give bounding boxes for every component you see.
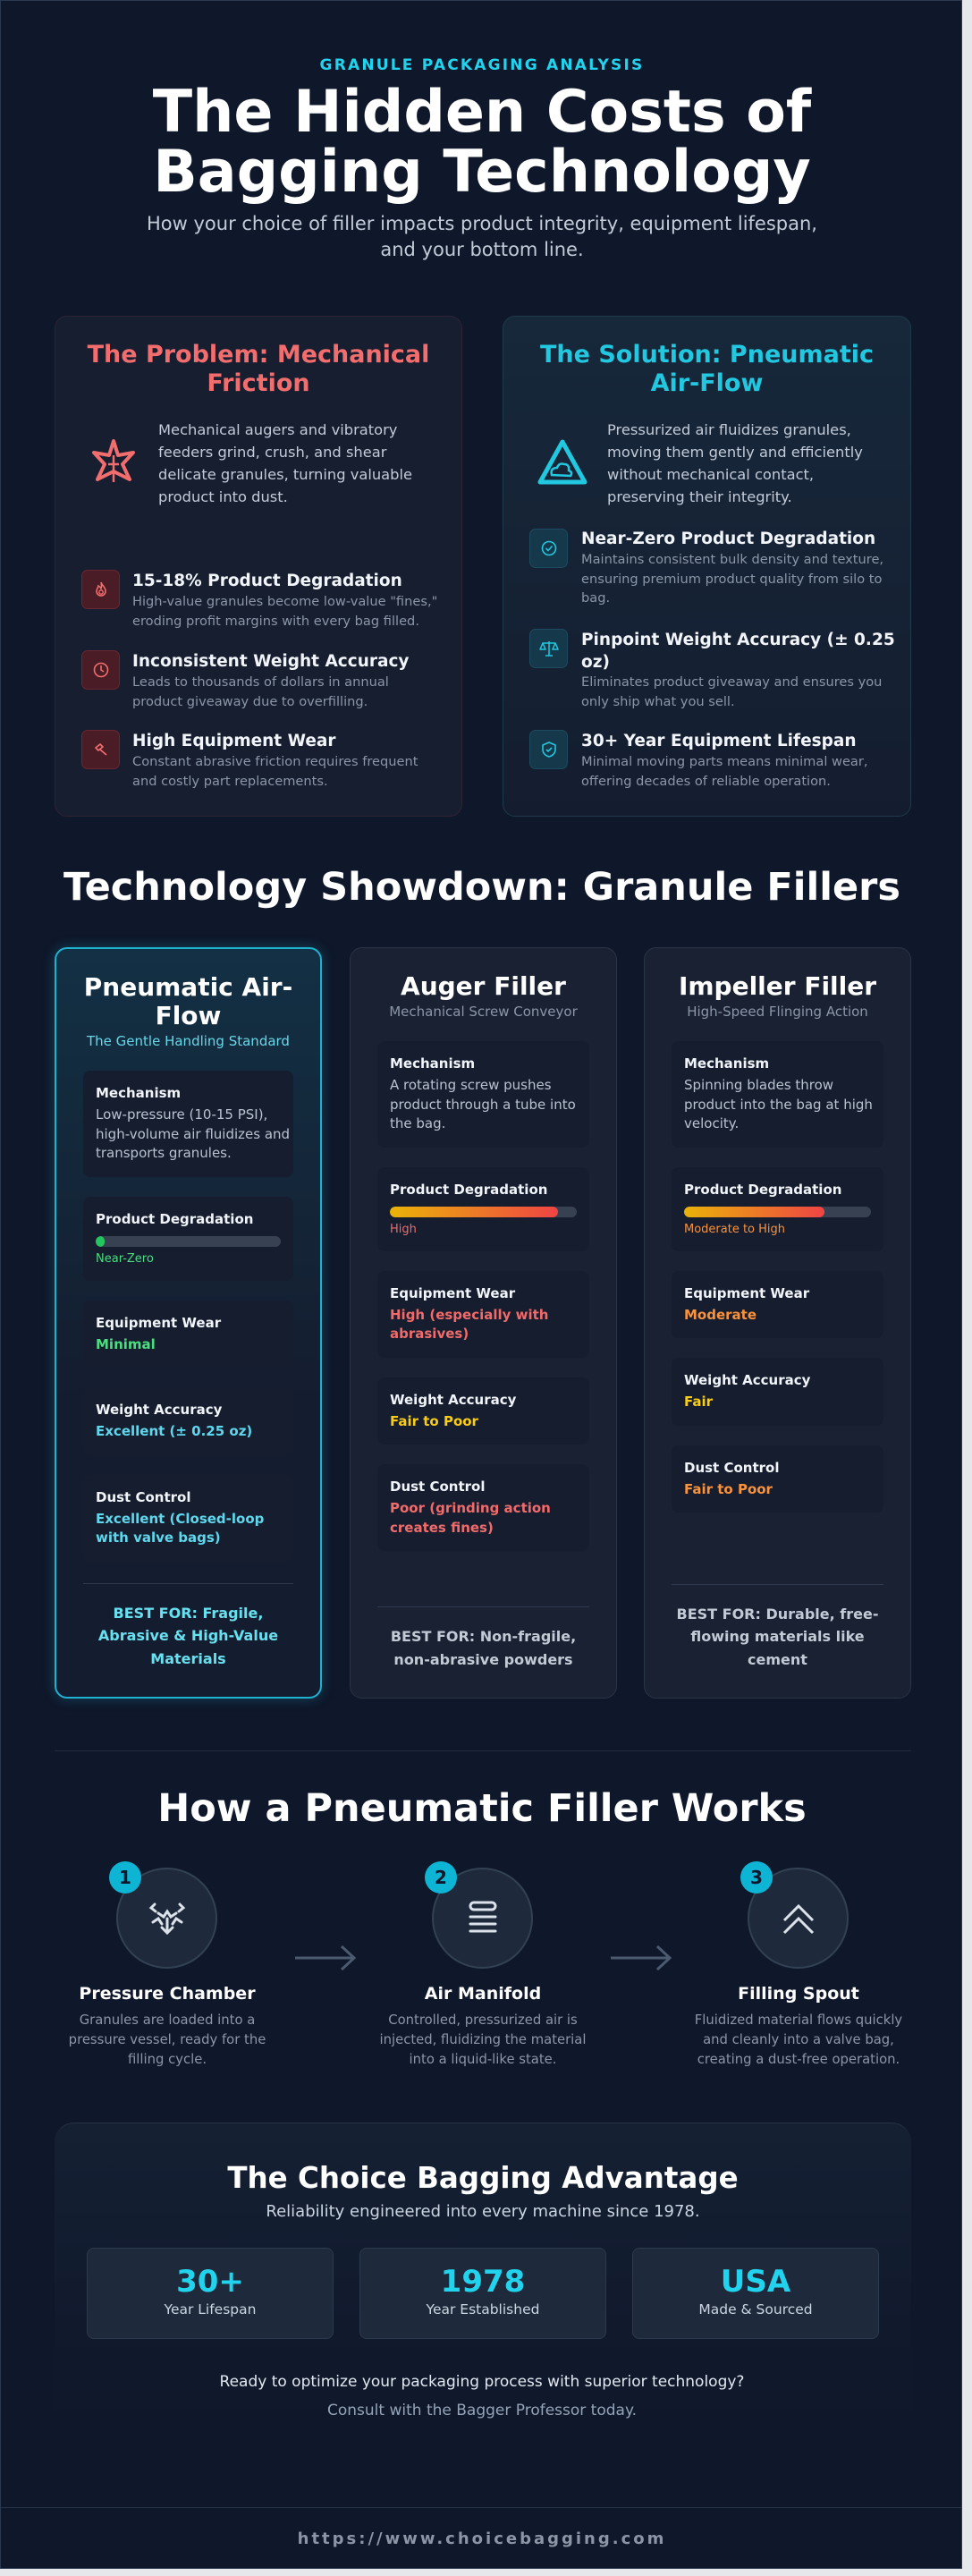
best for: BEST FOR: Fragile, <box>114 1605 263 1621</box>
step 3: Filling Spout <box>738 1984 859 2004</box>
title: The Hidden Costs of <box>153 79 811 146</box>
heading: how it works: How a Pneumatic Filler Works <box>157 1786 807 1831</box>
item: near-zero: bag. <box>581 590 610 606</box>
solution heading: Air-Flow <box>651 369 763 397</box>
box: dust <box>672 1445 883 1513</box>
step 3: creating a dust-free operation. <box>697 2052 900 2067</box>
item: wear: and costly part replacements. <box>132 773 328 789</box>
box: wear: abrasives) <box>390 1326 469 1342</box>
box: wear: Minimal <box>96 1336 156 1352</box>
subtitle <box>147 213 817 260</box>
icon: pressure chamber <box>116 1868 217 1969</box>
step 2: injected, fluidizing the material <box>380 2032 586 2047</box>
best for: cement <box>748 1651 807 1667</box>
badge 3 <box>740 1861 773 1894</box>
cta text: Ready to optimize your packaging process with superior technology? <box>220 2373 744 2391</box>
box: dust: Dust Control <box>96 1488 190 1504</box>
item: weight accuracy: oz) <box>581 653 610 672</box>
item: weight: product giveaway due to overfilling. <box>132 694 368 708</box>
stat: usa: Made & Sourced <box>698 2301 813 2318</box>
step 1: pressure vessel, ready for the <box>69 2032 266 2047</box>
box: degradation: Product Degradation <box>390 1181 547 1197</box>
box: weight: Weight Accuracy <box>390 1392 516 1408</box>
item: lifespan <box>529 730 868 789</box>
box: dust: creates fines) <box>390 1519 494 1535</box>
box: mechanism <box>377 1041 589 1147</box>
box: degradation: Product Degradation <box>96 1211 253 1227</box>
box: degradation <box>377 1166 589 1250</box>
box: degradation: Product Degradation <box>684 1181 841 1197</box>
best for: non-abrasive powders <box>393 1651 573 1667</box>
step 2: Air Manifold <box>425 1984 541 2004</box>
box: mechanism: transports granules. <box>96 1145 232 1161</box>
solution heading: The Solution: Pneumatic <box>540 341 874 369</box>
box: mechanism: the bag. <box>390 1115 445 1131</box>
kicker: GRANULE PACKAGING ANALYSIS <box>320 56 644 74</box>
item: lifespan: offering decades of reliable operation. <box>581 773 831 789</box>
item: weight: Inconsistent Weight Accuracy <box>132 652 410 671</box>
solution intro text: moving them gently and efficiently <box>607 444 863 460</box>
solution intro text: preserving their integrity. <box>607 488 792 504</box>
badge 2 <box>425 1861 457 1894</box>
step 2 <box>380 1861 586 2067</box>
title <box>153 79 812 206</box>
problem heading: The Problem: Mechanical <box>88 341 429 369</box>
item: weight accuracy <box>529 629 895 708</box>
box: dust: Poor (grinding action <box>390 1500 551 1516</box>
box: dust: Dust Control <box>684 1460 779 1476</box>
advantage heading: The Choice Bagging Advantage <box>227 2161 739 2195</box>
problem intro text: delicate granules, turning valuable <box>158 465 412 483</box>
icon: check circle <box>529 529 568 568</box>
box: weight: Fair <box>684 1394 713 1410</box>
box: weight: Weight Accuracy <box>96 1402 222 1418</box>
problem intro text: feeders grind, crush, and shear <box>158 444 386 460</box>
step 1: filling cycle. <box>128 2052 207 2067</box>
step 3: and cleanly into a valve bag, <box>703 2032 894 2047</box>
footer <box>1 2507 963 2570</box>
icon: burst star <box>91 439 135 482</box>
item: weight: Leads to thousands of dollars in annual <box>132 674 389 690</box>
card: pneumatic: Pneumatic Air- <box>84 972 292 1002</box>
box: weight: Excellent (± 0.25 oz) <box>96 1423 252 1439</box>
item: wear: High Equipment Wear <box>132 732 336 750</box>
item: near-zero: Maintains consistent bulk density and texture, <box>581 552 883 567</box>
stat: lifespan: 30+ <box>176 2264 244 2300</box>
solution intro text: Pressurized air fluidizes granules, <box>607 420 851 438</box>
item: wear <box>81 730 418 789</box>
box: wear <box>83 1301 293 1368</box>
box: weight <box>83 1387 293 1454</box>
stat: established: Year Established <box>427 2301 539 2318</box>
card: auger: Mechanical Screw Conveyor <box>389 1004 578 1020</box>
box: weight: Weight Accuracy <box>684 1372 810 1388</box>
best for <box>83 1583 293 1670</box>
badge 2: 2 <box>435 1867 447 1888</box>
step 1: Granules are loaded into a <box>80 2012 255 2028</box>
badge 1: 1 <box>119 1867 131 1888</box>
box: dust <box>377 1464 589 1551</box>
item: degradation <box>81 570 437 628</box>
box: dust: Fair to Poor <box>684 1481 773 1497</box>
box: weight: Fair to Poor <box>390 1413 478 1429</box>
box: degradation: Near-Zero <box>96 1252 154 1265</box>
item: weight accuracy: Pinpoint Weight Accuracy (± 0.25 <box>581 631 895 649</box>
advantage subtitle: Reliability engineered into every machine since 1978. <box>266 2202 700 2221</box>
box: weight <box>672 1358 883 1426</box>
stat: lifespan: Year Lifespan <box>165 2301 256 2318</box>
best for: BEST FOR: Non-fragile, <box>391 1628 576 1645</box>
cta sub: Consult with the Bagger Professor today. <box>327 2402 637 2419</box>
box: dust: Excellent (Closed-loop <box>96 1510 264 1526</box>
problem intro text: Mechanical augers and vibratory <box>158 420 397 438</box>
icon: manifold <box>432 1868 533 1969</box>
card: pneumatic: The Gentle Handling Standard <box>87 1033 290 1049</box>
item: near-zero: Near-Zero Product Degradation <box>581 530 875 548</box>
step 3 <box>695 1861 902 2067</box>
box: wear: High (especially with <box>390 1306 549 1322</box>
best for <box>377 1606 589 1671</box>
card: impeller: Impeller Filler <box>679 971 876 1001</box>
box: weight <box>377 1377 589 1445</box>
item: lifespan: Minimal moving parts means minimal wear, <box>581 754 868 769</box>
box: mechanism: product through a tube into <box>390 1097 576 1113</box>
badge 3: 3 <box>750 1867 763 1888</box>
stat: usa: USA <box>721 2264 790 2300</box>
title: Bagging Technology <box>153 139 811 206</box>
box: mechanism: Mechanism <box>684 1055 769 1072</box>
step 2: Controlled, pressurized air is <box>388 2012 578 2028</box>
icon: clock <box>81 650 120 690</box>
step 1 <box>69 1861 266 2067</box>
card: impeller: High-Speed Flinging Action <box>687 1004 868 1020</box>
problem intro text: product into dust. <box>158 488 288 504</box>
problem intro text <box>158 420 412 504</box>
item: near-zero <box>529 529 883 606</box>
box: mechanism <box>672 1041 883 1147</box>
box: mechanism: product into the bag at high <box>684 1097 873 1113</box>
box: degradation: Moderate to High <box>684 1222 785 1236</box>
icon: shield <box>529 730 568 769</box>
box: degradation <box>672 1166 883 1250</box>
icon: air triangle <box>538 440 587 485</box>
step 1: Pressure Chamber <box>79 1984 256 2004</box>
box: degradation <box>83 1197 293 1281</box>
best for: Materials <box>150 1649 226 1667</box>
solution intro text: without mechanical contact, <box>607 465 814 483</box>
box: wear: Moderate <box>684 1306 756 1322</box>
box: dust <box>83 1474 293 1562</box>
box: wear <box>377 1270 589 1358</box>
solution intro text <box>607 420 863 504</box>
icon: scale <box>529 629 568 668</box>
item: near-zero: ensuring premium product quality from silo to <box>581 571 882 587</box>
solution heading <box>540 341 874 397</box>
stat: usa <box>632 2248 879 2339</box>
box: mechanism: Spinning blades throw <box>684 1077 833 1093</box>
box: wear: Equipment Wear <box>684 1284 809 1301</box>
panel: advantage <box>55 2123 911 2480</box>
card: auger <box>350 947 617 1699</box>
heading: technology showdown: Technology Showdown: Granule Fillers <box>63 865 900 910</box>
stat: established: 1978 <box>441 2264 525 2300</box>
box: mechanism: A rotating screw pushes <box>390 1077 552 1093</box>
box: mechanism: Mechanism <box>96 1085 181 1101</box>
stat: established <box>359 2248 606 2339</box>
card: pneumatic: Flow <box>156 1001 221 1030</box>
box: dust: Dust Control <box>390 1479 485 1495</box>
item: lifespan: 30+ Year Equipment Lifespan <box>581 732 857 750</box>
subtitle: How your choice of filler impacts product integrity, equipment lifespan, <box>147 213 817 234</box>
panel: problem <box>55 316 462 817</box>
badge 1 <box>109 1861 141 1894</box>
step 3: Fluidized material flows quickly <box>695 2012 902 2028</box>
box: wear: Equipment Wear <box>96 1315 221 1331</box>
card: auger: Auger Filler <box>401 971 566 1001</box>
card: impeller <box>644 947 911 1699</box>
problem heading <box>88 341 429 397</box>
item: weight <box>81 650 410 708</box>
item: degradation: High-value granules become low-value "fines," <box>132 594 437 609</box>
problem heading: Friction <box>207 369 310 397</box>
item: weight accuracy: only ship what you sell. <box>581 694 735 708</box>
icon: flame <box>81 570 120 609</box>
box: mechanism <box>83 1071 293 1177</box>
box: dust: with valve bags) <box>96 1530 221 1546</box>
step 2: into a liquid-like state. <box>410 2052 556 2067</box>
item: weight accuracy: Eliminates product giveaway and ensures you <box>581 674 882 690</box>
best for: flowing materials like <box>690 1628 865 1645</box>
box: mechanism: Mechanism <box>390 1055 475 1072</box>
arrow 2 <box>611 1945 672 1970</box>
card: pneumatic <box>55 947 322 1699</box>
item: wear: Constant abrasive friction requires frequent <box>132 754 418 769</box>
box: wear: Equipment Wear <box>390 1284 515 1301</box>
best for: BEST FOR: Durable, free- <box>677 1605 878 1623</box>
box: mechanism: velocity. <box>684 1115 739 1131</box>
best for <box>672 1583 883 1671</box>
best for: Abrasive & High-Value <box>98 1627 278 1644</box>
footer url: https://www.choicebagging.com <box>298 2529 666 2548</box>
item: degradation: eroding profit margins with every bag filled. <box>132 614 419 628</box>
icon: hammer <box>81 730 120 769</box>
subtitle: and your bottom line. <box>380 239 584 260</box>
box: mechanism: Low-pressure (10-15 PSI), <box>96 1106 267 1123</box>
box: degradation: High <box>390 1222 417 1236</box>
stat: lifespan <box>87 2248 334 2339</box>
arrow 1 <box>295 1945 356 1970</box>
icon: chevrons <box>748 1868 849 1969</box>
box: mechanism: high-volume air fluidizes and <box>96 1125 290 1141</box>
panel: solution <box>503 316 911 817</box>
box: wear <box>672 1270 883 1338</box>
item: degradation: 15-18% Product Degradation <box>132 572 402 590</box>
